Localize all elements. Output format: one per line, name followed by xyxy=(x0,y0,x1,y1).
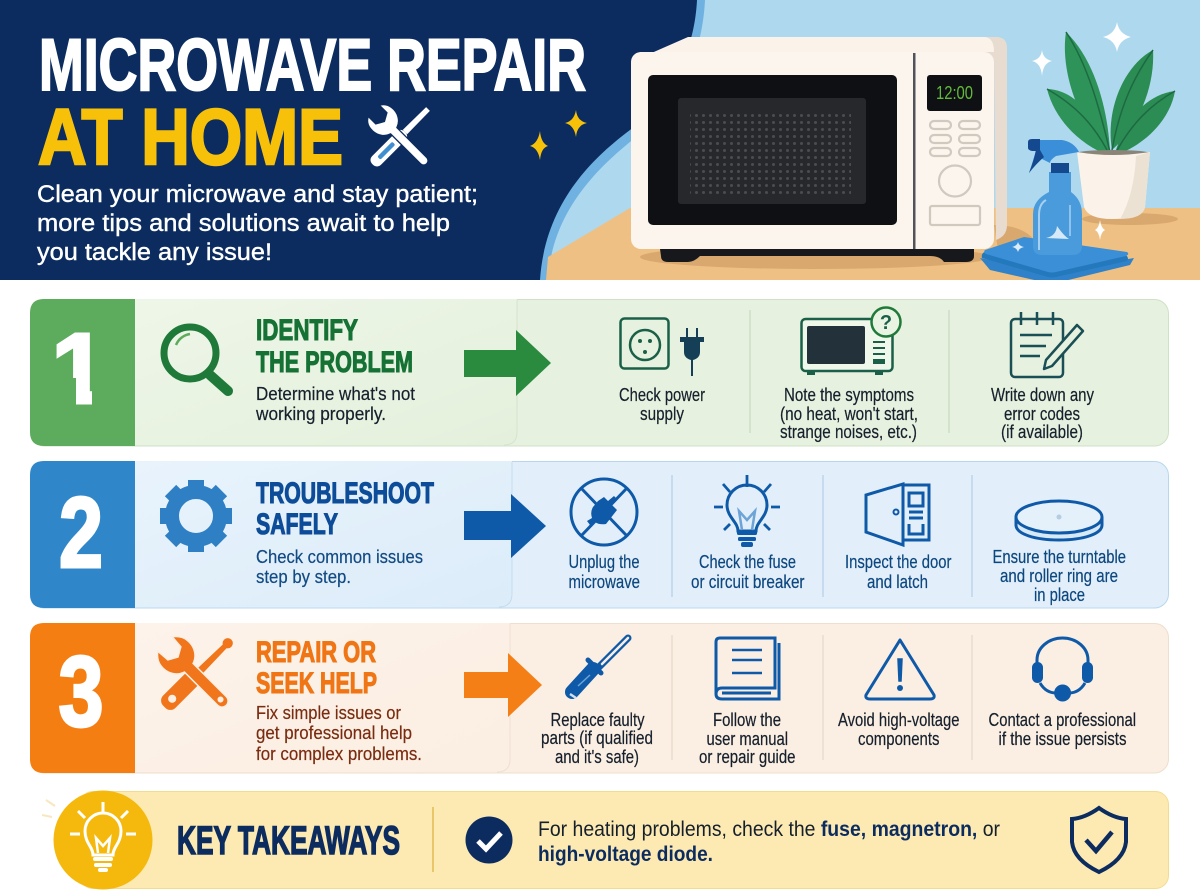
item: user manual: user manual xyxy=(706,729,788,749)
text: step 2 description xyxy=(256,546,423,587)
arrow: step 3 xyxy=(464,653,542,717)
item: note the symptoms xyxy=(780,308,918,442)
icon: check badge xyxy=(466,816,512,864)
illustration: potted plant xyxy=(1047,32,1178,225)
item: avoid high voltage xyxy=(838,640,960,749)
item: write down error codes xyxy=(991,312,1094,442)
item: write down error codes: error codes xyxy=(1004,404,1080,424)
subtitle: you tackle any issue! xyxy=(37,239,272,266)
item: turntable: Ensure the turntable xyxy=(992,547,1126,567)
panel: step 2 xyxy=(30,461,1168,608)
item: write down error codes: Write down any xyxy=(991,385,1094,405)
step number 1 xyxy=(30,299,135,446)
text: takeaway: high-voltage diode. xyxy=(538,842,713,866)
step number 2 xyxy=(30,461,135,608)
item: note the symptoms: (no heat, won't start, xyxy=(780,404,918,424)
illustration: microwave xyxy=(631,37,1040,269)
icon: white sparkles xyxy=(1032,22,1131,76)
item: check power supply: Check power xyxy=(619,385,705,405)
item: note the symptoms: ? xyxy=(880,312,892,334)
heading: key takeaways: KEY TAKEAWAYS xyxy=(177,819,400,863)
illustration: spray bottle xyxy=(1012,139,1105,255)
icon: magnifying glass xyxy=(164,327,228,391)
item: note the symptoms: Note the symptoms xyxy=(784,385,914,405)
step number 1: 1 xyxy=(51,313,107,425)
item: check the fuse xyxy=(691,475,805,592)
icon: gear xyxy=(160,480,232,552)
item: user manual xyxy=(699,638,796,767)
item: avoid high voltage: Avoid high-voltage xyxy=(838,710,960,730)
text: step 3 description xyxy=(256,702,422,764)
text: step 1 description: working properly. xyxy=(255,403,386,424)
text: step 2 description: step by step. xyxy=(256,566,351,587)
heading: repair or seek help: REPAIR OR xyxy=(256,636,376,669)
text: step 3 description: get professional help xyxy=(256,722,412,743)
arrow: step 2 xyxy=(464,494,546,558)
icon: shield check xyxy=(1072,808,1126,872)
item: replace faulty parts xyxy=(541,638,653,767)
item: turntable xyxy=(992,501,1126,605)
item: contact a professional: Contact a professional xyxy=(988,710,1136,730)
title: AT HOME xyxy=(38,92,343,181)
heading: troubleshoot safely: TROUBLESHOOT xyxy=(256,477,434,510)
item: inspect the door: and latch xyxy=(867,572,928,592)
subtitle xyxy=(37,181,478,266)
item: turntable: and roller ring are xyxy=(1000,566,1118,586)
item: user manual: or repair guide xyxy=(699,747,796,767)
panel: key takeaways xyxy=(42,790,1168,890)
icon: orange tools xyxy=(152,631,239,718)
text: takeaway xyxy=(538,817,1000,866)
heading: identify the problem: IDENTIFY xyxy=(256,314,358,347)
panel: step 1 xyxy=(30,299,1168,446)
item: avoid high voltage: components xyxy=(858,729,940,749)
icon: header wrench and screwdriver xyxy=(363,100,437,174)
illustration: blue cloth xyxy=(980,237,1134,284)
item: write down error codes: (if available) xyxy=(1001,422,1083,442)
item: turntable: in place xyxy=(1034,585,1085,605)
heading: repair or seek help: SEEK HELP xyxy=(256,667,377,700)
text: step 1 description xyxy=(255,383,415,424)
item: inspect the door xyxy=(845,484,952,592)
panel: step 3 xyxy=(30,623,1168,773)
icon: yellow light bulb xyxy=(42,790,152,890)
text: step 2 description: Check common issues xyxy=(256,546,423,567)
text: step 3 description: Fix simple issues or xyxy=(256,702,401,723)
item: user manual: Follow the xyxy=(713,710,781,730)
heading: repair or seek help xyxy=(256,636,377,700)
title xyxy=(38,25,586,181)
item: check power supply xyxy=(619,318,705,424)
text: takeaway: For heating problems, check the fuse, magnetron, or xyxy=(538,817,1000,841)
title: MICROWAVE REPAIR xyxy=(39,25,586,106)
item: replace faulty parts: and it's safe) xyxy=(555,747,639,767)
arrow: step 1 xyxy=(464,330,551,396)
item: inspect the door: Inspect the door xyxy=(845,552,952,572)
heading: identify the problem xyxy=(256,314,413,379)
item: note the symptoms: strange noises, etc.) xyxy=(780,422,917,442)
step number 2: 2 xyxy=(59,477,103,589)
item: check the fuse: Check the fuse xyxy=(699,552,796,572)
heading: identify the problem: THE PROBLEM xyxy=(256,346,413,379)
item: unplug the microwave: Unplug the xyxy=(568,552,640,572)
header banner xyxy=(0,0,1200,280)
item: check power supply: supply xyxy=(640,404,684,424)
heading: troubleshoot safely xyxy=(256,477,434,541)
step number 3 xyxy=(30,623,135,773)
item: replace faulty parts: parts (if qualified xyxy=(541,728,653,748)
item: check the fuse: or circuit breaker xyxy=(691,572,805,592)
item: contact a professional: if the issue persists xyxy=(998,729,1126,749)
item: contact a professional xyxy=(988,638,1136,749)
subtitle: Clean your microwave and stay patient; xyxy=(37,181,478,208)
item: unplug the microwave: microwave xyxy=(568,572,640,592)
text: step 3 description: for complex problems. xyxy=(256,743,422,764)
icon: gold sparkles xyxy=(530,110,587,160)
step number 3: 3 xyxy=(58,636,104,748)
illustration: microwave: 12:00 xyxy=(936,83,973,103)
subtitle: more tips and solutions await to help xyxy=(37,210,450,237)
text: step 1 description: Determine what's not xyxy=(256,383,415,404)
item: replace faulty parts: Replace faulty xyxy=(550,710,644,730)
item: unplug the microwave xyxy=(568,479,640,592)
heading: troubleshoot safely: SAFELY xyxy=(256,508,338,541)
